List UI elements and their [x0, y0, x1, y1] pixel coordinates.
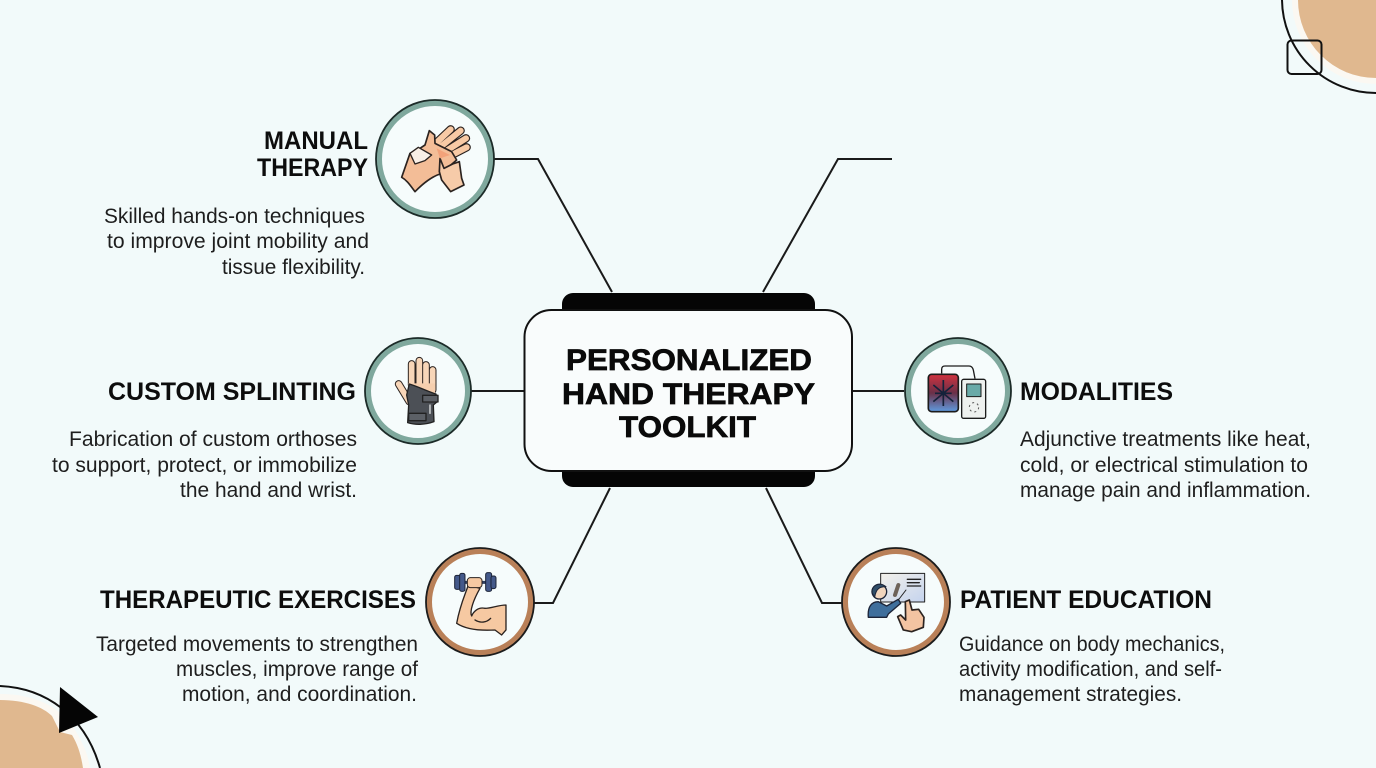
- text: therapeutic exercises description: motion, and coordination.: [182, 683, 417, 706]
- title: PERSONALIZED: [566, 344, 812, 377]
- icon: therapeutic exercises arm: [426, 548, 534, 656]
- text: patient education description: [959, 633, 1225, 706]
- text: custom splinting description: to support, protect, or immobilize: [52, 454, 357, 477]
- heading: manual therapy: THERAPY: [257, 154, 368, 182]
- icon: patient education: [842, 548, 950, 656]
- title: HAND THERAPY: [562, 378, 815, 411]
- heading: modalities: MODALITIES: [1020, 378, 1173, 406]
- central title panel: [524, 293, 852, 487]
- heading: manual therapy: [257, 127, 368, 182]
- title: TOOLKIT: [619, 411, 756, 444]
- icon: custom splint: [365, 338, 471, 444]
- text: manual therapy description: tissue flexibility.: [222, 256, 365, 279]
- icon: manual therapy hands: [376, 100, 494, 218]
- text: patient education description: activity modification, and self-: [959, 658, 1222, 681]
- text: modalities description: [1020, 428, 1311, 502]
- text: custom splinting description: the hand and wrist.: [180, 479, 357, 502]
- text: custom splinting description: Fabrication of custom orthoses: [69, 428, 357, 451]
- text: patient education description: management strategies.: [959, 683, 1182, 706]
- text: manual therapy description: [104, 205, 369, 279]
- text: therapeutic exercises description: muscles, improve range of: [176, 658, 418, 681]
- icon: modalities devices: [905, 338, 1011, 444]
- text: manual therapy description: Skilled hands-on techniques: [104, 205, 365, 228]
- text: modalities description: manage pain and inflammation.: [1020, 479, 1311, 502]
- title: [562, 344, 815, 444]
- text: therapeutic exercises description: [96, 633, 418, 706]
- text: therapeutic exercises description: Targeted movements to strengthen: [96, 633, 418, 656]
- text: custom splinting description: [52, 428, 357, 502]
- heading: therapeutic exercises: THERAPEUTIC EXERCISES: [100, 586, 416, 614]
- corner decoration: top right: [1282, 0, 1376, 93]
- connector lines: [471, 159, 904, 603]
- heading: custom splinting: CUSTOM SPLINTING: [108, 378, 356, 406]
- heading: patient education: PATIENT EDUCATION: [960, 586, 1212, 614]
- text: modalities description: cold, or electrical stimulation to: [1020, 454, 1308, 477]
- text: manual therapy description: to improve joint mobility and: [107, 230, 369, 253]
- text: patient education description: Guidance on body mechanics,: [959, 633, 1225, 656]
- text: modalities description: Adjunctive treatments like heat,: [1020, 428, 1311, 451]
- corner decoration: bottom left: [0, 686, 100, 768]
- heading: manual therapy: MANUAL: [264, 127, 368, 155]
